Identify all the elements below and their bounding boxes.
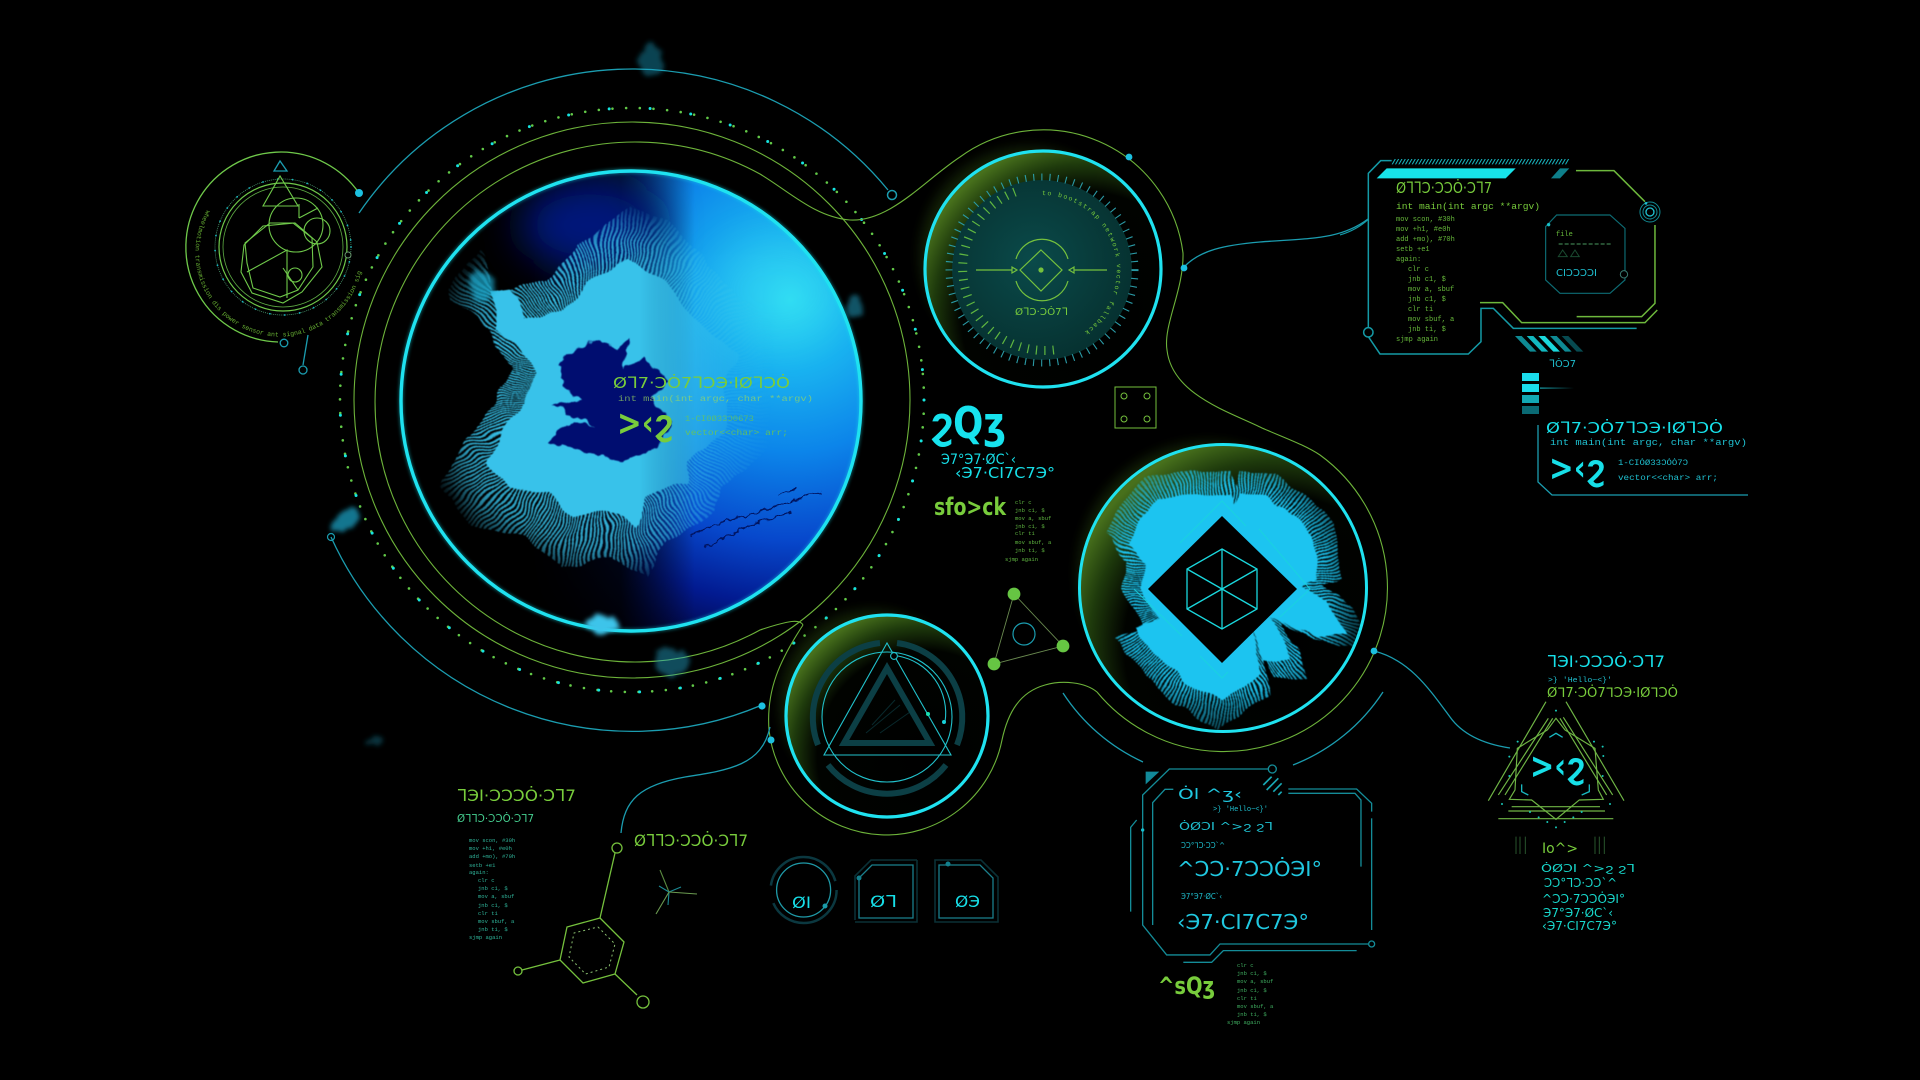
heading block: centre labels: Э7°Э7·ØC`‹	[941, 452, 1016, 468]
button: 01	[771, 857, 837, 923]
heading block: centre labels: ‹Э7·CI7C7Э°	[955, 464, 1055, 482]
planet overlay text	[613, 373, 813, 444]
connector and molecule diagram: ØᒣᒣƆ·ƆƆȮ·Ɔᒣ7	[634, 831, 748, 850]
icon: square with four holes	[1115, 387, 1156, 428]
text block: lower-left listing: clr c	[478, 877, 495, 884]
panel: radar dial	[916, 144, 1163, 389]
panel: lower right text block: Øᒣ7·ƆȮ7ᒣƆЭ·IØᒣƆȮ	[1546, 418, 1723, 437]
assembly listing: mov +h1, #e0h	[1396, 226, 1451, 234]
heading block: centre labels: jnb c1, $	[1015, 507, 1045, 514]
gadget: top-left geometry dial: wheelmotion transmission dis power sensor ant signal data transmission sig	[196, 210, 362, 337]
connector and molecule diagram	[514, 727, 774, 1008]
text block: lower-left listing	[457, 786, 576, 941]
text block: lower-left listing: jnb ti, $	[478, 926, 508, 933]
blue connector to pyramid	[1371, 648, 1510, 748]
assembly listing: setb +e1	[1396, 246, 1430, 254]
icon buttons row	[771, 857, 998, 923]
panel: bottom data window: ‹Э7·CI7C7Э°	[1177, 910, 1309, 934]
window frame	[1340, 161, 1660, 354]
panel: diamond circle	[1078, 442, 1366, 732]
radar green halo	[920, 147, 1136, 363]
heading block: centre labels: clr ti	[1015, 530, 1036, 537]
panel: pyramid emblem with labels: >} 'Hello~<}'	[1548, 677, 1612, 685]
panel: pyramid emblem with labels: ƆƆ°ᒣƆ·ƆƆ`^	[1544, 876, 1617, 890]
heading block: centre labels: clr c	[1015, 499, 1032, 506]
button: 02: Øᒣ	[870, 892, 897, 911]
gadget: top-left geometry dial	[185, 151, 363, 375]
bottom green label and listing: mov a, sbuf	[1237, 978, 1273, 985]
bottom green label and listing: jnb c1, $	[1237, 987, 1267, 994]
panel: lower right text block	[1522, 357, 1748, 495]
text block: lower-left listing: again:	[469, 869, 489, 876]
planet cyan ring glow	[401, 171, 861, 631]
panel: bottom data window: ȮØƆI ^>ϩ ϩᒣ	[1179, 820, 1273, 833]
panel: lower right text block: 1-CIȮØ33ƆȮȮ7Ɔ	[1618, 459, 1688, 468]
panel: top right code window: int main(int argc **argv)	[1396, 202, 1540, 212]
panel: bottom data window: Ȯl ^ʒ‹	[1178, 785, 1242, 803]
panel: lower right text block: ᒣȮƆ7	[1549, 357, 1576, 370]
panel: top right code window: CIƆƆƆƆI	[1556, 268, 1597, 279]
text block: lower-left listing: add +mo), #70h	[469, 853, 515, 860]
panel: pyramid emblem with labels: ᒣЭI·ƆƆƆȮ·Ɔᒣ7	[1547, 652, 1665, 671]
panel: top right code window	[1340, 161, 1660, 354]
text block: lower-left listing: mov scon, #30h	[469, 837, 515, 844]
planet overlay text: int main(int argc, char **argv)	[618, 395, 813, 404]
assembly listing: mov sbuf, a	[1408, 316, 1454, 324]
bottom green label and listing: clr c	[1237, 962, 1254, 969]
text block: lower-left listing: ᒣЭI·ƆƆƆȮ·Ɔᒣ7	[457, 786, 576, 805]
text block: lower-left listing: ØᒣᒣƆ·ƆƆȮ·Ɔᒣ7	[457, 812, 534, 825]
planet cyan ring	[401, 171, 861, 631]
planet	[390, 160, 861, 640]
assembly listing: mov scon, #30h	[1396, 216, 1455, 224]
colour swatches	[1522, 373, 1574, 414]
panel: lower right text block: int main(int argc, char **argv)	[1550, 438, 1747, 448]
contour line linking the circles	[375, 130, 1387, 835]
planet base sphere	[558, 172, 860, 629]
panel: bottom data window	[1131, 765, 1375, 962]
dark navy upper cap	[520, 180, 660, 270]
bottom green label and listing: jnb ti, $	[1237, 1011, 1267, 1018]
planet overlay text: 1-CI0Ø33Ɔ0673	[685, 415, 754, 424]
assembly listing	[1396, 216, 1455, 344]
button: 03	[935, 860, 998, 922]
panel: pyramid emblem with labels: ‹Э7·CI7C7Э°	[1542, 919, 1617, 933]
pyramid line art	[1488, 702, 1624, 854]
panel: radar dial: to bootstrap network vector fallback	[1042, 190, 1120, 334]
panel: lower right text block: vector<<char> arr;	[1618, 474, 1718, 483]
planet overlay text: >‹ϩ	[617, 403, 673, 444]
panel: top right code window: ØᒣᒣƆ·ƆƆȮ·Ɔᒣ7	[1396, 178, 1492, 197]
button: 02	[855, 860, 917, 922]
panel: bottom data window: >} 'Hello~<}'	[1213, 806, 1268, 814]
bottom green label and listing: jnb c1, $	[1237, 970, 1267, 977]
heading block: centre labels: mov sbuf, a	[1015, 539, 1052, 546]
hatch strip	[1393, 154, 1570, 170]
heading block: centre labels: jnb c1, $	[1015, 523, 1045, 530]
heading block: centre labels: sjmp again	[1005, 556, 1038, 563]
heading block: centre labels	[930, 398, 1055, 563]
icon: small asterisk node	[656, 870, 697, 914]
assembly listing: add +mo), #70h	[1396, 236, 1455, 244]
panel: top right code window: file	[1556, 231, 1573, 239]
text block: lower-left listing: jnb c1, $	[478, 885, 508, 892]
assembly listing: jnb ti, $	[1408, 326, 1446, 334]
assembly listing: jnb c1, $	[1408, 296, 1446, 304]
panel: pyramid emblem with labels: Э7°Э7·ØC`‹	[1543, 906, 1613, 920]
icon: three node triangle	[988, 588, 1069, 670]
assembly listing: clr c	[1408, 266, 1429, 274]
panel: triangle circle	[780, 610, 988, 817]
bright highlight	[705, 235, 845, 345]
panel: bottom data window: ƆƆ°ᒣƆ·ƆƆ`^	[1181, 840, 1225, 850]
panel: lower right text block: >‹ϩ	[1549, 448, 1605, 489]
navy core of burst	[548, 339, 673, 463]
panel: radar dial: ØᒣƆ·ƆȮ7ᒣ	[1015, 305, 1068, 318]
bottom green label and listing	[1158, 962, 1274, 1026]
inner octagon	[1546, 215, 1625, 293]
heading block: centre labels: ϩQʒ	[930, 398, 1006, 449]
radar cyan ring	[925, 151, 1161, 387]
planet overlay text: Øᒣ7·ƆȮ7ᒣƆЭ·IØᒣƆȮ	[613, 373, 790, 392]
bottom green label and listing: clr ti	[1237, 995, 1258, 1002]
outer diamond lines	[1134, 501, 1310, 678]
text block: lower-left listing: mov a, sbuf	[478, 893, 514, 900]
planet overlay text: vector<<char> arr;	[685, 429, 788, 438]
panel: pyramid emblem with labels	[1488, 652, 1678, 933]
text block: lower-left listing: clr ti	[478, 910, 499, 917]
heading block: centre labels: jnb ti, $	[1015, 547, 1045, 554]
assembly listing: clr ti	[1408, 306, 1433, 314]
orbit rings around planet	[328, 69, 924, 731]
triangle gauge arcs	[813, 643, 962, 794]
assembly listing: sjmp again	[1396, 336, 1438, 344]
panel: bottom data window: ^ƆƆ·7ƆƆȮЭI°	[1177, 857, 1322, 881]
HUD infographic canvas	[185, 40, 1748, 1025]
heading block: centre labels: mov a, sbuf	[1015, 515, 1051, 522]
panel: pyramid emblem with labels: Øᒣ7·ƆȮ7ᒣƆЭ·IØᒣƆȮ	[1547, 684, 1678, 701]
night side shadow	[404, 172, 692, 630]
assembly listing: mov a, sbuf	[1408, 286, 1454, 294]
text block: lower-left listing: mov sbuf, a	[478, 918, 515, 925]
panel: pyramid emblem with labels: Io^>	[1542, 841, 1578, 857]
text block: lower-left listing: setb +e1	[469, 862, 496, 869]
text block: lower-left listing: jnb c1, $	[478, 902, 508, 909]
triangle cyan ring	[786, 615, 988, 817]
heading block: centre labels: sfo>ck	[934, 493, 1007, 521]
smoke wisps around planet	[327, 42, 863, 745]
text block: lower-left listing: mov +h1, #e0h	[469, 845, 512, 852]
assembly listing: again:	[1396, 256, 1421, 264]
panel: bottom data window: Э7°Э7·ØC`‹	[1181, 891, 1222, 901]
panel: pyramid emblem with labels: >‹ϩ	[1530, 746, 1585, 787]
panel: pyramid emblem with labels: ^ƆƆ·7ƆƆȮЭI°	[1542, 890, 1625, 906]
stripes	[1515, 336, 1537, 352]
window frame	[1131, 765, 1375, 962]
text block: lower-left listing: sjmp again	[469, 934, 502, 941]
hexagon cube	[1187, 549, 1257, 629]
bottom green label and listing: sjmp again	[1227, 1019, 1260, 1026]
blue connector: radar to code panel	[1126, 154, 1368, 271]
panel: pyramid emblem with labels: ȮØƆI ^>ϩ ϩᒣ	[1541, 862, 1635, 875]
button: 01: ØI	[792, 893, 811, 912]
button: 03: ØЭ	[955, 892, 980, 911]
bottom green label and listing: ^sQʒ	[1158, 972, 1215, 1000]
surface wrinkles	[690, 487, 822, 548]
blue arcs below diamond circle	[1063, 692, 1383, 765]
burst of cloud	[480, 257, 740, 526]
diamond cyan ring	[1080, 444, 1366, 732]
assembly listing: jnb c1, $	[1408, 276, 1446, 284]
cyan ink splash	[1117, 484, 1347, 702]
bottom green label and listing: mov sbuf, a	[1237, 1003, 1274, 1010]
radar crosshair	[976, 239, 1107, 301]
